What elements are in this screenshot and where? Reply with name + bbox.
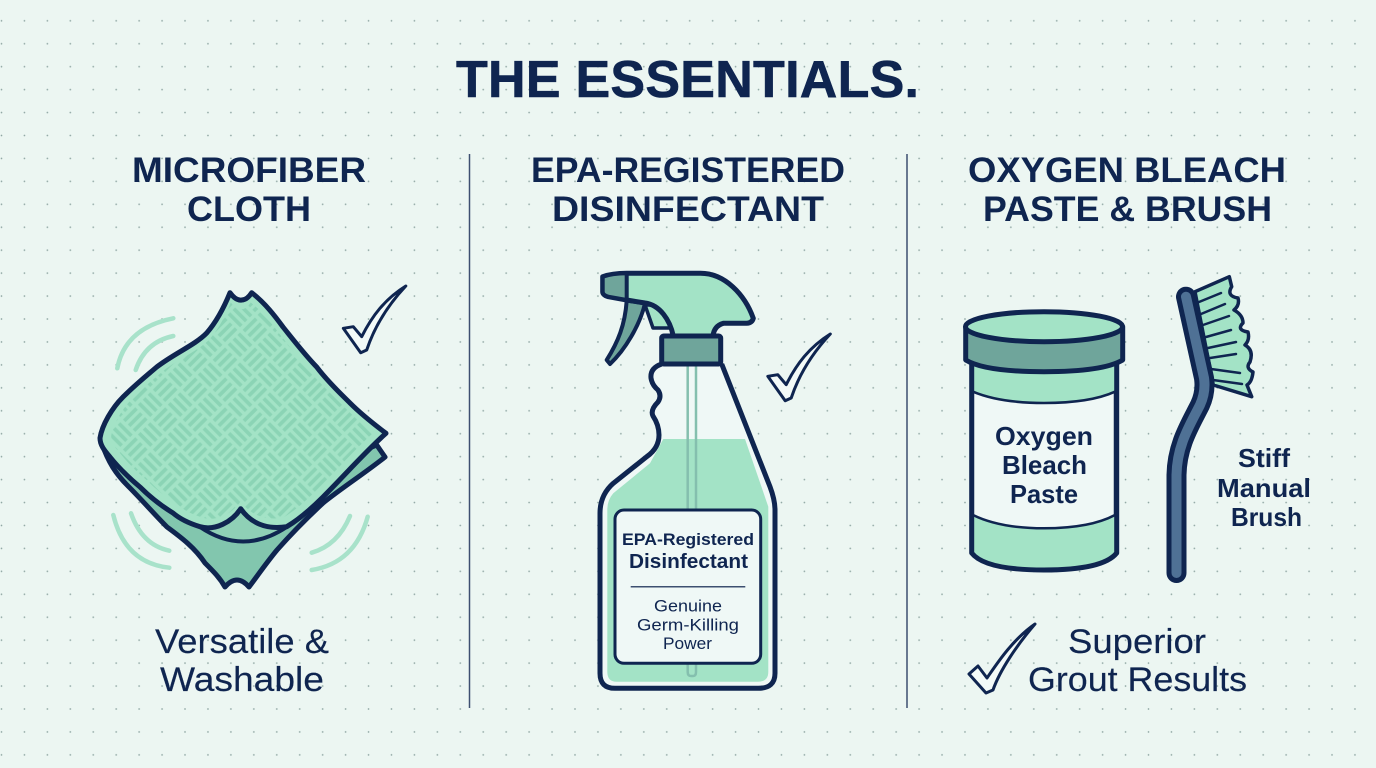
brush label: [1217, 443, 1311, 532]
icon: motion arcs: [113, 318, 368, 570]
weave texture: [111, 302, 374, 519]
icon: check mark: [768, 334, 830, 401]
cloth fold: [200, 509, 287, 542]
jar text: [995, 421, 1093, 509]
jar lid top: [966, 312, 1122, 342]
caption: Grout Results: [1028, 661, 1247, 699]
product label: Power: [663, 634, 712, 653]
brush label: Manual: [1217, 473, 1311, 503]
heading: paste and brush: PASTE & BRUSH: [983, 190, 1272, 229]
dip tube: [688, 364, 696, 676]
icon: brush: [1176, 277, 1253, 573]
icon: spray bottle: [600, 273, 775, 688]
connector: [645, 305, 675, 328]
heading: microfiber cloth: [132, 151, 366, 229]
brush label: Stiff: [1238, 443, 1290, 473]
product label: Disinfectant: [629, 551, 748, 573]
collar: [662, 336, 721, 364]
heading: disinfectant: DISINFECTANT: [552, 190, 824, 229]
jar text: Bleach: [1002, 450, 1087, 480]
heading: paste and brush: [968, 151, 1286, 229]
panel: disinfectant: [531, 151, 845, 688]
caption: Superior: [1068, 623, 1206, 661]
handle fill: [1176, 297, 1204, 573]
caption: Washable: [160, 661, 324, 699]
heading: microfiber cloth: MICROFIBER: [132, 151, 366, 190]
icon: folded cloth: [100, 293, 386, 587]
jar text: Paste: [1010, 479, 1078, 509]
bristle lines: [1199, 293, 1242, 384]
caption: [155, 623, 329, 699]
heading: disinfectant: EPA-REGISTERED: [531, 151, 845, 190]
icon: paste jar: [966, 312, 1123, 570]
icon: check mark: [343, 286, 406, 353]
product label: Genuine: [654, 597, 722, 616]
jar text: Oxygen: [995, 421, 1093, 451]
bottle body: [600, 364, 775, 688]
panel: oxygen bleach paste and brush: [966, 151, 1311, 699]
cloth front layer: [100, 293, 386, 528]
jar body: [972, 350, 1117, 570]
icon: check mark: [969, 624, 1035, 693]
brush label: Brush: [1231, 502, 1302, 532]
trigger: [607, 301, 645, 364]
heading: disinfectant: [531, 151, 845, 229]
product label: [615, 510, 761, 663]
bottle outline: [600, 364, 775, 688]
liquid: [607, 439, 768, 682]
title: THE ESSENTIALS.: [456, 51, 919, 109]
jar label: [973, 392, 1115, 528]
sprayer head: [603, 273, 753, 336]
caption: Versatile &: [155, 623, 329, 661]
caption: [1028, 623, 1247, 699]
panel: microfiber cloth: [100, 151, 406, 699]
heading: microfiber cloth: CLOTH: [187, 190, 311, 229]
bristles: [1195, 277, 1253, 397]
product label: EPA-Registered: [622, 530, 754, 549]
cloth outline: [100, 293, 386, 528]
heading: paste and brush: OXYGEN BLEACH: [968, 151, 1286, 190]
cloth back layer: [102, 443, 385, 587]
jar lid: [966, 327, 1123, 372]
nozzle: [603, 273, 627, 300]
handle outline: [1176, 297, 1204, 573]
product label: Germ-Killing: [637, 616, 739, 635]
